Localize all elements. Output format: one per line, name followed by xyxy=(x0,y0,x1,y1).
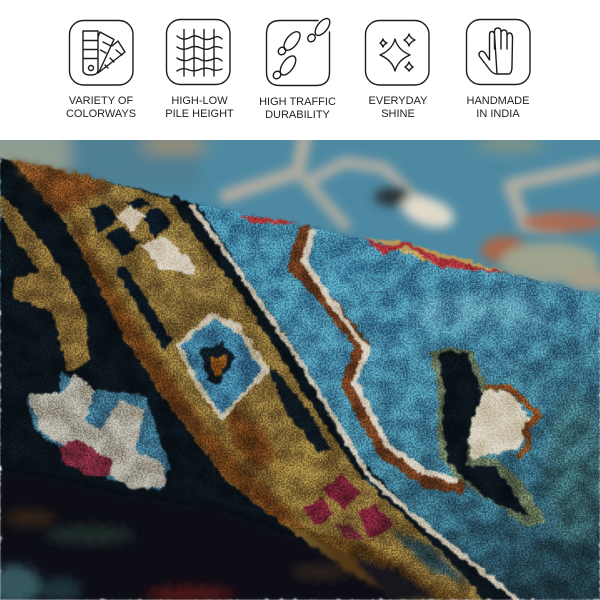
red and gold border on blue field xyxy=(240,216,508,273)
label: handmade in india: HANDMADE xyxy=(467,95,529,107)
label: high-low pile height: HIGH-LOW xyxy=(171,95,228,107)
icon: variety of colorways xyxy=(70,20,133,85)
cream and black edge stripes xyxy=(175,200,518,600)
lower right brown rug fold xyxy=(300,528,470,600)
maroon lozenge motif xyxy=(302,475,395,540)
rug roll xyxy=(0,158,600,600)
label: variety of colorways: COLORWAYS xyxy=(66,108,136,120)
label: high traffic durability: DURABILITY xyxy=(265,109,331,121)
pile mottling xyxy=(0,150,600,600)
tan and navy left motif xyxy=(0,170,290,530)
dark stripe beside diamond xyxy=(268,368,330,452)
bird motif xyxy=(430,347,548,526)
blue diamond motif xyxy=(176,312,270,422)
blue rug field xyxy=(197,204,600,600)
tan ornamental border band xyxy=(10,160,485,600)
white and blue floral motif xyxy=(26,372,170,490)
photo: rolled rug close-up xyxy=(0,130,600,600)
pile texture xyxy=(0,150,600,600)
navy and cream flower motif on tan band xyxy=(89,197,195,275)
label: variety of colorways: VARIETY OF xyxy=(69,95,133,107)
blurred rug foreground xyxy=(0,470,410,600)
page background xyxy=(0,0,600,140)
label: everyday shine: SHINE xyxy=(381,108,415,120)
icon: handmade in india xyxy=(466,20,530,84)
label: everyday shine: EVERYDAY xyxy=(369,95,427,107)
dark stripe in tan band xyxy=(115,265,172,350)
blurred rug background xyxy=(0,130,600,310)
brown and cream vine motif xyxy=(294,231,458,486)
label: high-low pile height: PILE HEIGHT xyxy=(165,108,234,120)
label: high traffic durability: HIGH TRAFFIC xyxy=(259,96,336,108)
icon: high traffic durability xyxy=(266,16,333,85)
label: handmade in india: IN INDIA xyxy=(476,108,520,120)
rug roll base xyxy=(0,158,600,600)
icon: everyday shine xyxy=(366,20,429,85)
icon: high-low pile height xyxy=(166,20,230,84)
